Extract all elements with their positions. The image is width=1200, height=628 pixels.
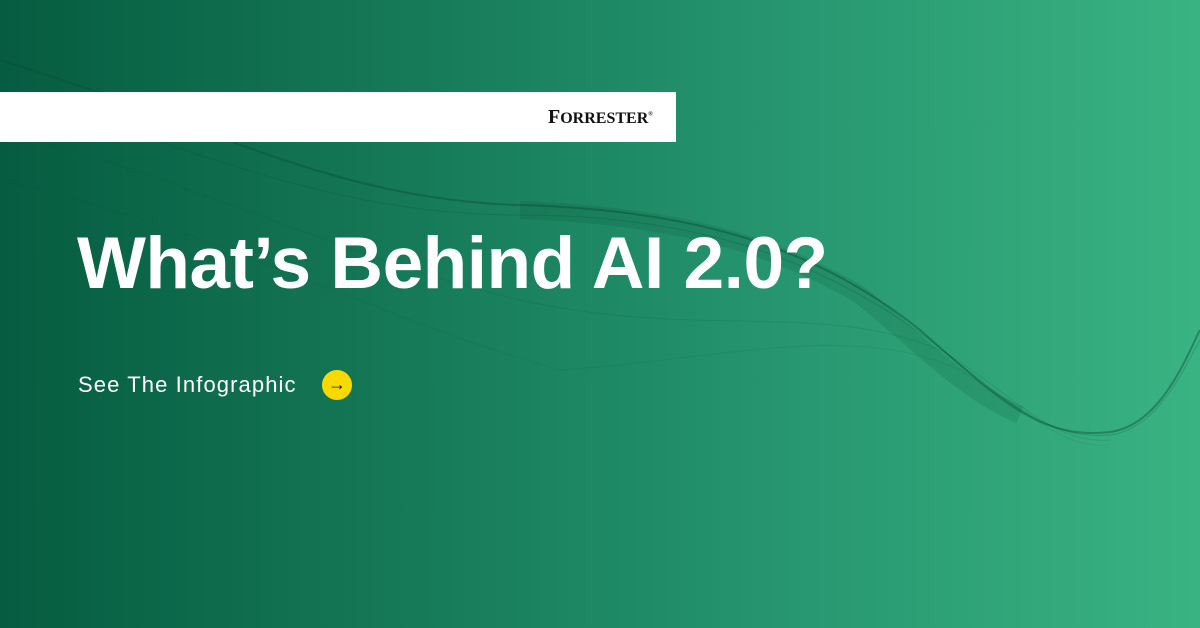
call to action [78,370,352,400]
call to action: See The Infographic [78,372,297,397]
logo bar [0,92,676,142]
logo: Forrester: FORRESTER® [548,106,653,128]
icon: arrow button [322,370,352,400]
title: What’s Behind AI 2.0? [77,223,828,304]
icon: arrow button: → [328,374,346,394]
